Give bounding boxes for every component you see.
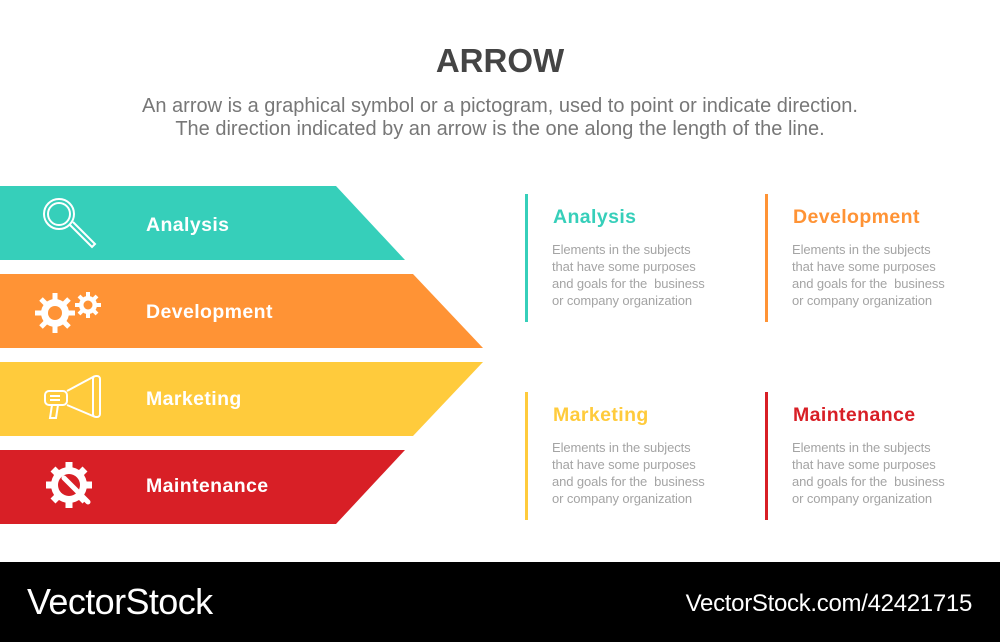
footer url: VectorStock.com/42421715 (686, 590, 972, 617)
icon: magnifier (44, 199, 95, 247)
arrow: maintenance (0, 450, 405, 524)
card: marketing (525, 392, 725, 520)
subtitle: The direction indicated by an arrow is the one along the length of the line. (175, 118, 825, 140)
card: development: that have some purposes (792, 259, 936, 274)
arrow: marketing (0, 362, 483, 436)
card: marketing: or company organization (552, 491, 692, 506)
card: development: Elements in the subjects (792, 242, 931, 257)
card: maintenance (765, 392, 965, 520)
card: analysis: Elements in the subjects (552, 242, 691, 257)
card: development (765, 194, 965, 322)
arrow chart (0, 186, 483, 524)
arrow labels: Marketing (146, 388, 242, 410)
subtitle (142, 95, 858, 140)
footer brand: VectorStock (27, 581, 212, 622)
card: maintenance: and goals for the business (792, 474, 945, 489)
card: marketing: that have some purposes (552, 457, 696, 472)
arrow: development (0, 274, 483, 348)
card: development: or company organization (792, 293, 932, 308)
card: marketing: Marketing (553, 404, 649, 426)
card: analysis: or company organization (552, 293, 692, 308)
card: development: and goals for the business (792, 276, 945, 291)
card: analysis (525, 194, 725, 322)
card: maintenance: Maintenance (793, 404, 916, 426)
card: analysis: and goals for the business (552, 276, 705, 291)
icon: gear wrench (46, 462, 92, 508)
title: ARROW (436, 42, 564, 79)
icon: megaphone (45, 376, 100, 418)
arrow labels: Development (146, 301, 273, 323)
card: marketing: Elements in the subjects (552, 440, 691, 455)
card: maintenance: Elements in the subjects (792, 440, 931, 455)
card: maintenance: or company organization (792, 491, 932, 506)
arrow labels: Maintenance (146, 475, 269, 497)
icon: gears (35, 292, 101, 333)
footer (0, 562, 1000, 642)
arrow labels: Analysis (146, 214, 229, 236)
card: analysis: Analysis (553, 206, 636, 228)
card: development: Development (793, 206, 920, 228)
arrow labels (146, 214, 273, 497)
card: analysis: that have some purposes (552, 259, 696, 274)
card: marketing: and goals for the business (552, 474, 705, 489)
arrow: analysis (0, 186, 405, 260)
subtitle: An arrow is a graphical symbol or a pictogram, used to point or indicate direction. (142, 95, 858, 117)
card: maintenance: that have some purposes (792, 457, 936, 472)
